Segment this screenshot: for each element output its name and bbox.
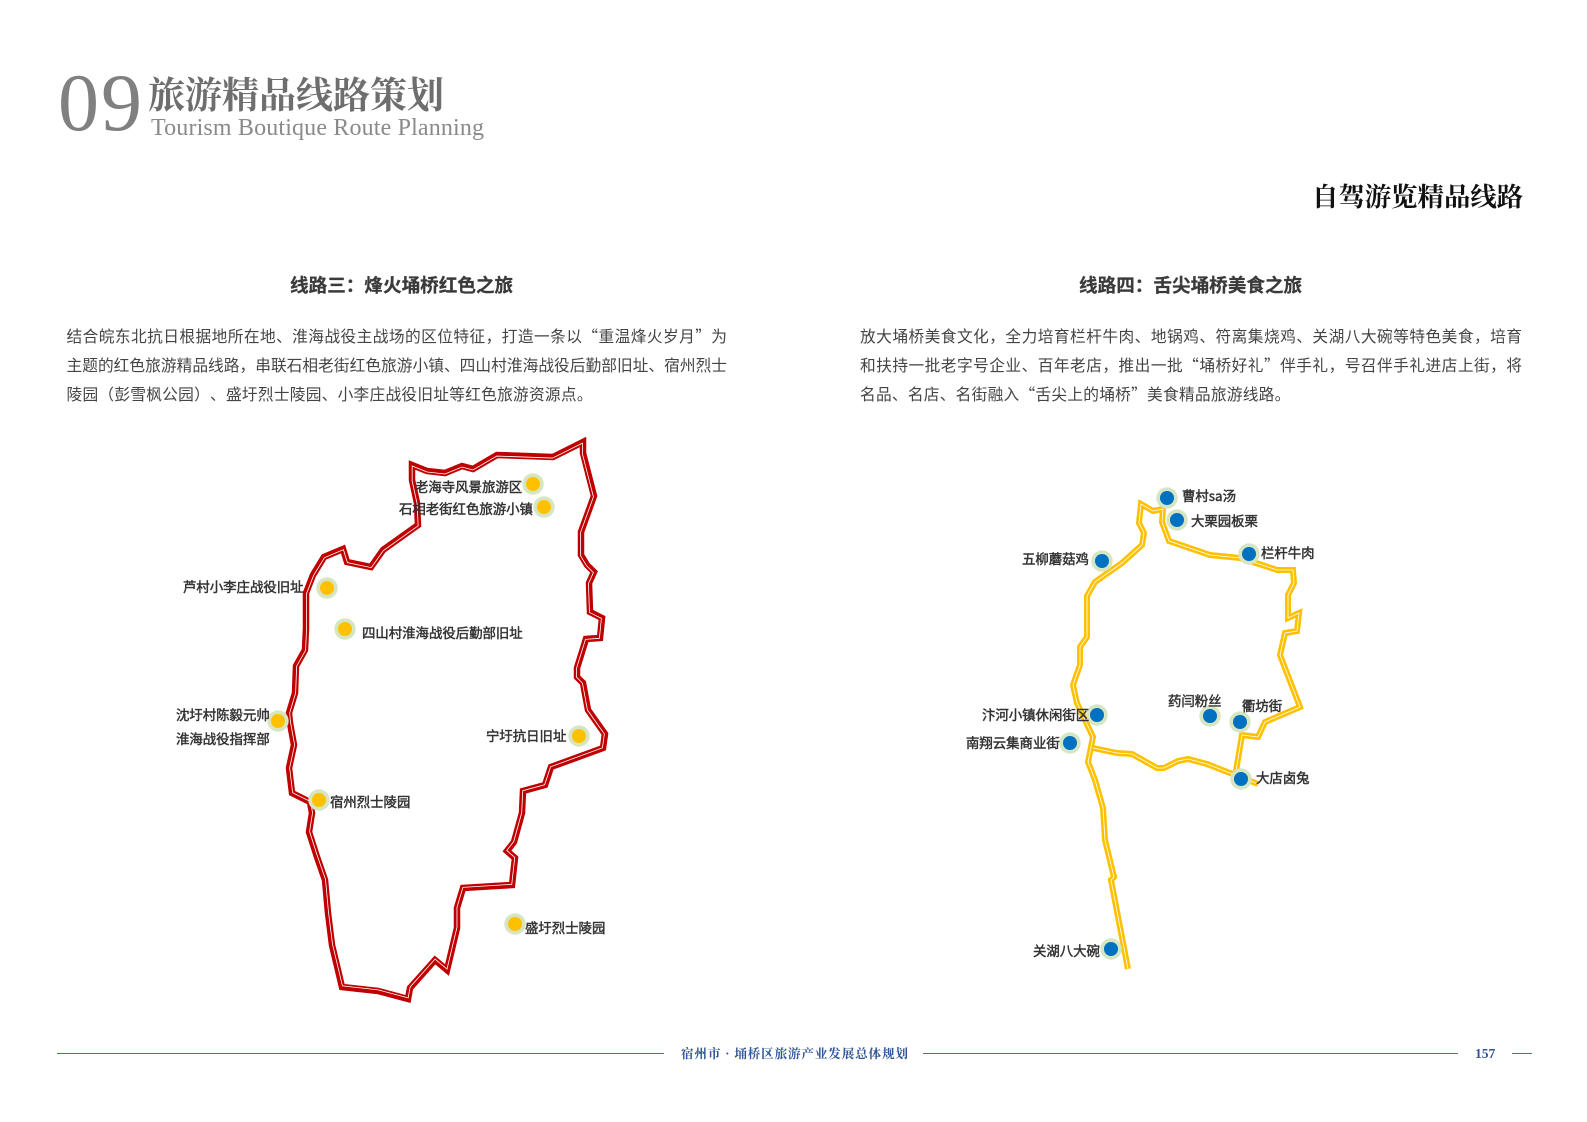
text block: route three description: 陵园（彭雪枫公园）、盛圩烈士陵园、小李庄战役旧址等红色旅游资源点。 (66, 382, 593, 405)
marker: 五柳蘑菇鸡 (1022, 548, 1113, 572)
footer (57, 1043, 1532, 1062)
marker: 宿州烈士陵园: 宿州烈士陵园 (330, 791, 410, 811)
english title: Tourism Boutique Route Planning (151, 115, 484, 141)
marker: 药闫粉丝: 药闫粉丝 (1168, 690, 1222, 710)
section number: 09 (58, 57, 142, 148)
subheading: self-drive routes: 自驾游览精品线路 (1312, 176, 1523, 214)
marker: 衢坊街 (1229, 695, 1282, 733)
marker: 老海寺风景旅游区: 老海寺风景旅游区 (415, 476, 522, 496)
marker: 沈圩村陈毅元帅淮海战役指挥部: 沈圩村陈毅元帅 (176, 704, 270, 724)
marker: 汴河小镇休闲街区: 汴河小镇休闲街区 (982, 704, 1089, 724)
marker: 衢坊街: 衢坊街 (1242, 695, 1282, 715)
map: route four yellow network (966, 485, 1315, 969)
marker: 四山村淮海战役后勤部旧址: 四山村淮海战役后勤部旧址 (362, 622, 523, 642)
footer title: 宿州市 · 埇桥区旅游产业发展总体规划 (681, 1043, 908, 1062)
marker: 石相老街红色旅游小镇: 石相老街红色旅游小镇 (399, 498, 533, 518)
page title block (58, 57, 484, 148)
marker: 盛圩烈士陵园 (504, 913, 605, 937)
text block: route four description (860, 324, 1522, 405)
text block: route four description: 放大埇桥美食文化，全力培育栏杆牛肉、地锅鸡、符离集烧鸡、关湖八大碗等特色美食，培育 (860, 324, 1522, 347)
marker: 南翔云集商业街: 南翔云集商业街 (966, 732, 1060, 752)
marker: 芦村小李庄战役旧址 (183, 576, 338, 599)
heading: route four: 线路四：舌尖埇桥美食之旅 (1079, 271, 1302, 298)
page number: 157 (1475, 1046, 1496, 1061)
heading: route three: 线路三：烽火埇桥红色之旅 (290, 271, 513, 298)
marker: 芦村小李庄战役旧址: 芦村小李庄战役旧址 (183, 576, 304, 596)
marker: 药闫粉丝 (1168, 690, 1222, 727)
text block: route four description: 和扶持一批老字号企业、百年老店，推出一批“埇桥好礼”伴手礼，号召伴手礼进店上街，将 (860, 353, 1522, 376)
text block: route three description: 主题的红色旅游精品线路，串联石相老街红色旅游小镇、四山村淮海战役后勤部旧址、宿州烈士 (66, 353, 727, 376)
marker: 关湖八大碗 (1033, 938, 1122, 960)
marker: 沈圩村陈毅元帅淮海战役指挥部 (176, 704, 289, 748)
marker: 大栗园板栗 (1166, 509, 1258, 531)
marker: 曹村sa汤 (1156, 485, 1236, 509)
marker: 大店卤兔: 大店卤兔 (1256, 767, 1310, 787)
marker: 宁圩抗日旧址: 宁圩抗日旧址 (486, 725, 566, 745)
text block: route four description: 名品、名店、名街融入“舌尖上的埇桥”美食精品旅游线路。 (860, 382, 1291, 405)
marker: 曹村sa汤: 曹村sa汤 (1182, 485, 1236, 505)
marker: 栏杆牛肉 (1238, 542, 1315, 565)
yellow route lines (1073, 504, 1300, 969)
marker: 大店卤兔 (1230, 767, 1310, 790)
red route outline (289, 442, 605, 999)
text block: route three description (66, 324, 727, 405)
text block: route three description: 结合皖东北抗日根据地所在地、淮海战役主战场的区位特征，打造一条以“重温烽火岁月”为 (66, 324, 727, 347)
chinese title: 旅游精品线路策划 (148, 65, 444, 119)
marker: 五柳蘑菇鸡: 五柳蘑菇鸡 (1022, 548, 1089, 568)
map: route three red loop (176, 442, 605, 999)
marker: 盛圩烈士陵园: 盛圩烈士陵园 (525, 917, 605, 937)
marker: 沈圩村陈毅元帅淮海战役指挥部: 淮海战役指挥部 (176, 728, 270, 748)
marker: 大栗园板栗: 大栗园板栗 (1191, 510, 1258, 530)
marker: 栏杆牛肉: 栏杆牛肉 (1261, 542, 1315, 562)
marker: 关湖八大碗: 关湖八大碗 (1033, 940, 1100, 960)
